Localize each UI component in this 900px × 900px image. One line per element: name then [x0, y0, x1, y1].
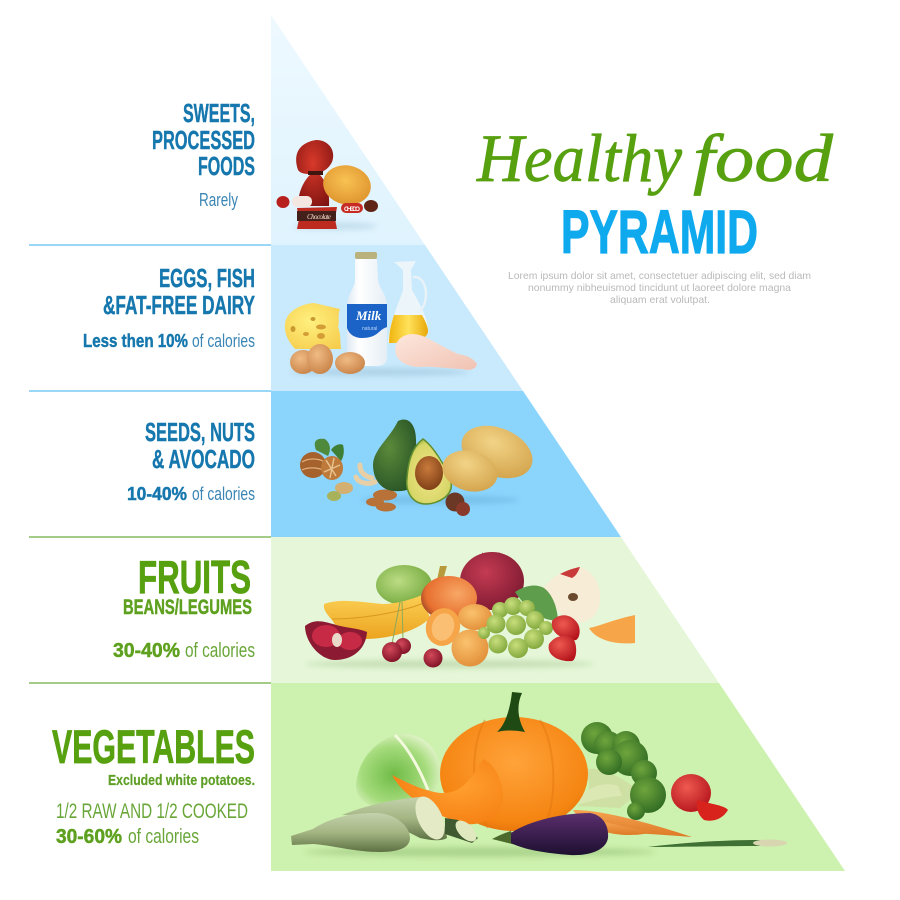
illustration: sweets: [276, 140, 378, 230]
heading: Healthy food: [476, 120, 834, 196]
icon: almonds: [366, 490, 397, 512]
label: eggs, fish and dairy: &FAT-FREE DAIRY: [103, 290, 255, 320]
intro text: aliquam erat volutpat.: [610, 295, 710, 306]
icon: oil jug: [388, 261, 428, 343]
icon: chocolate: Chocolate: [307, 213, 331, 221]
icon: pumpkin slice: [392, 759, 503, 824]
label: vegetables: 30-60%: [56, 826, 122, 848]
icon: cabbage: [356, 734, 440, 808]
icon: milk bottle: [347, 252, 387, 366]
label: sweets: FOODS: [198, 151, 255, 181]
icon: whole avocado: [373, 420, 420, 491]
label: seeds, nuts and avocado: SEEDS, NUTS: [145, 417, 255, 447]
title: [476, 120, 834, 306]
pyramid tier: eggs, fish and dairy: [271, 245, 523, 391]
label: eggs, fish and dairy: EGGS, FISH: [159, 263, 255, 293]
icon: scallion: [648, 840, 787, 847]
label: seeds, nuts and avocado: [127, 417, 255, 504]
icon: pumpkin: [440, 692, 588, 831]
pyramid tier: seeds, nuts and avocado: [271, 391, 621, 537]
label: fruits: of calories: [185, 640, 255, 662]
icon: milk bottle: Milk: [355, 308, 382, 323]
icon: hazelnuts: [446, 492, 470, 516]
icon: grape leaf: [515, 585, 558, 620]
label: eggs, fish and dairy: Less then 10%: [83, 331, 188, 351]
icon: tomato: [671, 774, 728, 821]
icon: eggplant: [492, 813, 608, 855]
pyramid tier: vegetables: [271, 683, 845, 871]
icon: cherries: [382, 602, 442, 668]
icon: cheese: [285, 303, 341, 349]
illustration: seeds, nuts and avocado: [300, 416, 540, 516]
icon: walnuts: [300, 439, 344, 480]
label: fruits: BEANS/LEGUMES: [123, 596, 252, 619]
icon: avocado half: [407, 439, 451, 504]
label: sweets: [152, 98, 255, 210]
pyramid: [271, 15, 845, 871]
icon: broccoli: [578, 722, 666, 820]
label: vegetables: 1/2 RAW AND 1/2 COOKED: [56, 800, 248, 823]
icon: pomegranate: [460, 552, 524, 610]
pyramid tier: sweets: [271, 15, 425, 245]
icon: pistachios and cashews: [327, 465, 375, 501]
label: sweets: SWEETS,: [183, 98, 255, 128]
icon: apricots: [421, 604, 492, 666]
label: sweets: Rarely: [199, 190, 238, 210]
illustration: dairy, eggs and chicken: [285, 252, 477, 376]
label: eggs, fish and dairy: [83, 263, 255, 351]
icon: small candies: CHECO: [344, 206, 360, 213]
icon: apple half: [542, 567, 600, 622]
icon: grapes: [478, 597, 553, 658]
icon: cookie: [319, 161, 375, 209]
icon: pomegranate piece: [305, 621, 367, 660]
heading: Healthy food: food: [693, 120, 834, 196]
icon: carrots: [573, 810, 692, 837]
illustration: vegetables: [291, 692, 787, 857]
intro text: nonummy nibheuismod tincidunt ut laoreet dolore magna: [528, 283, 791, 294]
icon: eggs: [290, 344, 365, 374]
icon: peach slice: [589, 615, 635, 643]
icon: candy bag: [296, 140, 333, 206]
icon: strawberries: [549, 615, 580, 661]
heading: Healthy food: Healthy: [476, 120, 683, 196]
label: vegetables: Excluded white potatoes.: [108, 772, 255, 789]
label: seeds, nuts and avocado: of calories: [192, 484, 255, 504]
illustration: fruits: [305, 552, 635, 668]
icon: cut zucchini: [342, 792, 480, 845]
label: eggs, fish and dairy: of calories: [192, 331, 255, 351]
label: vegetables: of calories: [128, 826, 199, 848]
label: vegetables: [52, 720, 255, 848]
label: vegetables: VEGETABLES: [52, 720, 255, 773]
intro text: [508, 271, 811, 306]
heading: PYRAMID: PYRAMID: [561, 198, 758, 266]
label: sweets: PROCESSED: [152, 125, 255, 155]
icon: bananas: [324, 595, 430, 639]
label: fruits: 30-40%: [113, 640, 180, 662]
label: fruits: [113, 551, 255, 662]
label: seeds, nuts and avocado: 10-40%: [127, 484, 187, 504]
icon: peach: [421, 566, 477, 620]
pyramid tier: fruits: [271, 537, 719, 683]
icon: zucchini: [291, 813, 410, 852]
label: seeds, nuts and avocado: & AVOCADO: [152, 444, 255, 474]
icon: milk bottle: natural: [362, 326, 377, 332]
intro text: Lorem ipsum dolor sit amet, consectetuer adipiscing elit, sed diam: [508, 271, 811, 282]
icon: potatoes: [438, 416, 540, 498]
icon: chicken leg: [395, 334, 477, 370]
icon: green apple: [376, 565, 432, 605]
label: fruits: FRUITS: [138, 551, 251, 603]
